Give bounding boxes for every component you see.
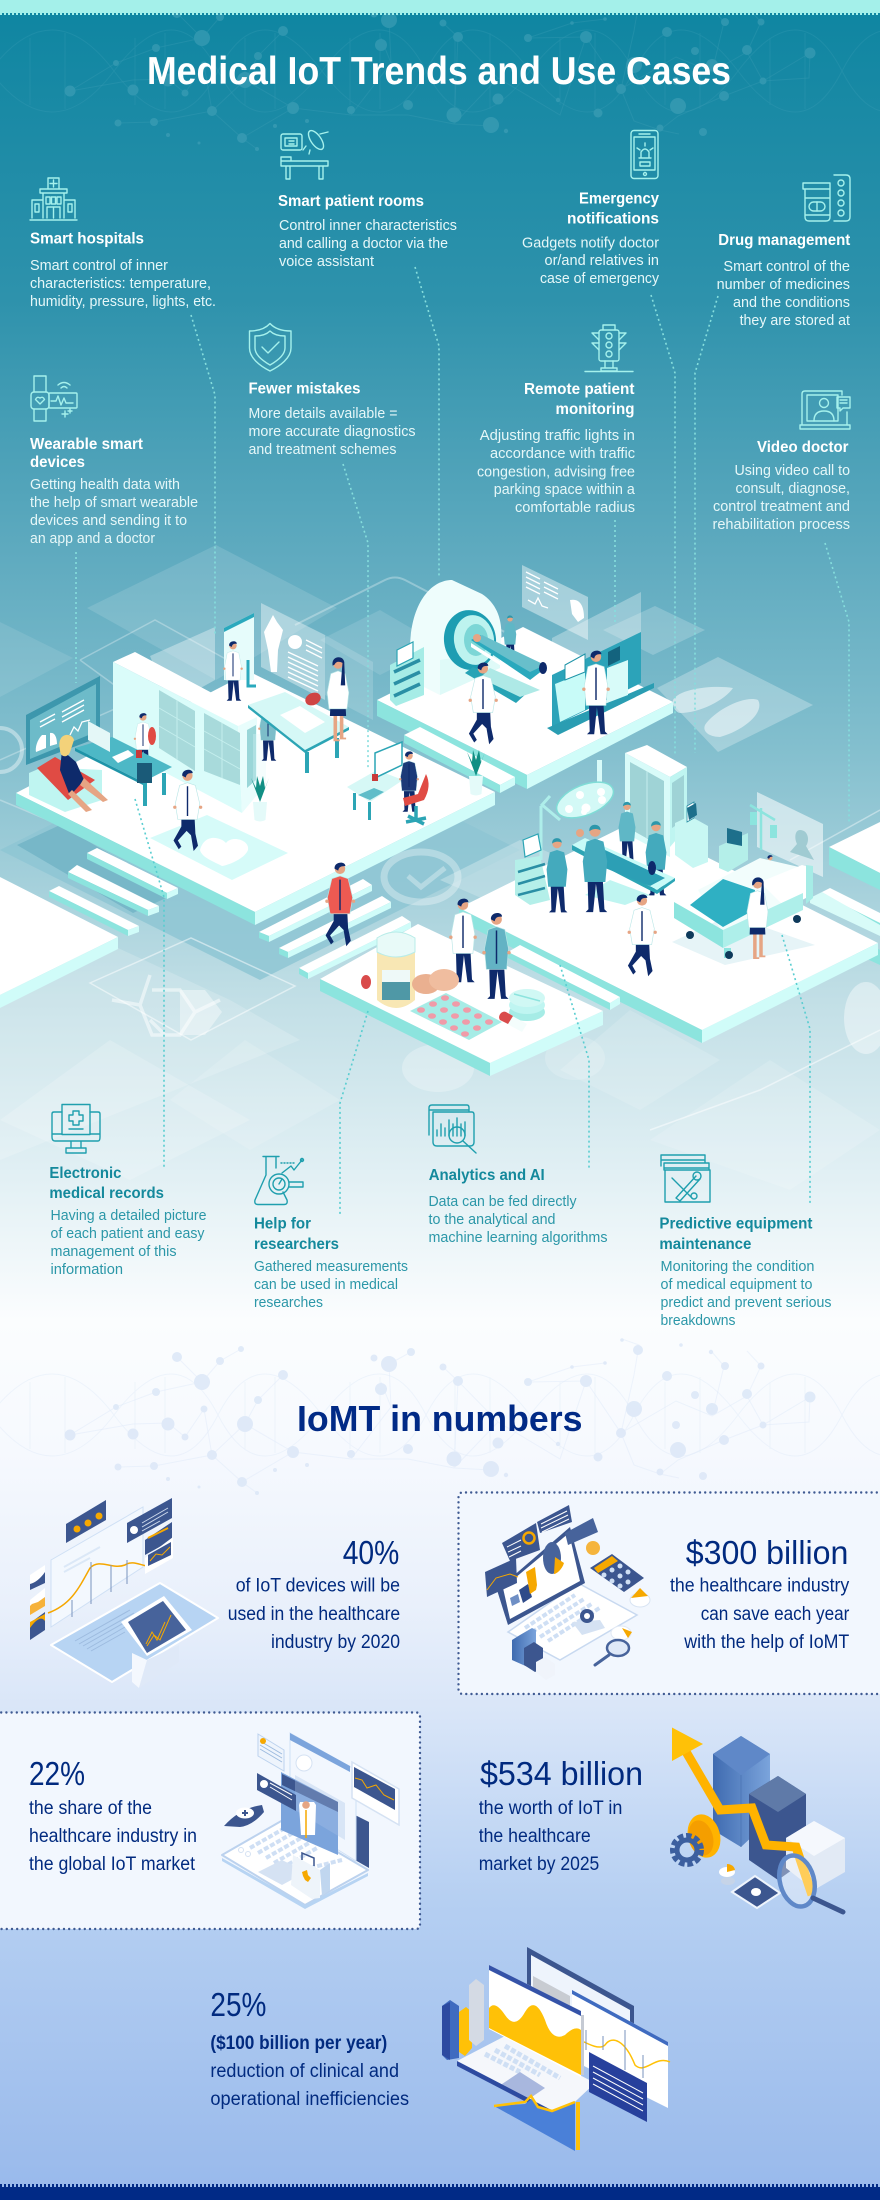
icon: flask with gauge bbox=[255, 1156, 304, 1204]
description bbox=[428, 1194, 608, 1246]
back panels in offices bbox=[150, 603, 373, 720]
stat: 25 percent bbox=[210, 1947, 670, 2151]
description: humidity, pressure, lights, etc. bbox=[30, 294, 216, 310]
description bbox=[660, 1259, 832, 1329]
description: Having a detailed picture bbox=[50, 1208, 206, 1224]
description: the help of smart wearable bbox=[30, 495, 198, 511]
description: Data can be fed directly bbox=[428, 1194, 577, 1210]
description bbox=[712, 463, 850, 533]
dotted box bbox=[458, 1492, 880, 1694]
description: Getting health data with bbox=[30, 477, 180, 493]
figure: $300 billion bbox=[686, 1535, 848, 1572]
description: of each patient and easy bbox=[50, 1226, 205, 1242]
description bbox=[50, 1208, 206, 1278]
description: the worth of IoT in bbox=[479, 1798, 622, 1819]
figure: $534 billion bbox=[480, 1756, 643, 1793]
right stair bars bbox=[259, 879, 411, 979]
patient in bed bbox=[764, 855, 776, 894]
floating patient data panel bbox=[522, 565, 588, 640]
description: number of medicines bbox=[717, 277, 850, 293]
description: rehabilitation process bbox=[712, 517, 850, 533]
anesthesia cart bbox=[515, 834, 550, 905]
icon: windows with tools bbox=[661, 1155, 710, 1202]
callout: video doctor bbox=[712, 391, 850, 533]
MRI scanner bbox=[410, 580, 501, 695]
callout: remote patient monitoring bbox=[477, 325, 636, 516]
description bbox=[228, 1576, 400, 1653]
surgical lamp bbox=[541, 760, 618, 860]
salmon pills bbox=[412, 969, 459, 994]
cabinet block bbox=[113, 652, 266, 813]
description: the healthcare industry bbox=[670, 1576, 850, 1597]
hospital bed bbox=[674, 858, 813, 959]
description: characteristics: temperature, bbox=[30, 276, 211, 292]
description: the share of the bbox=[29, 1798, 152, 1819]
description: More details available = bbox=[248, 406, 398, 422]
callout: smart patient rooms bbox=[278, 128, 457, 270]
illustration: tablet and floating charts bbox=[30, 1498, 218, 1688]
wall monitor with lungs bbox=[26, 676, 100, 765]
heading: Smart hospitals bbox=[30, 230, 144, 248]
icon: traffic light bbox=[585, 325, 633, 372]
callout: help for researchers bbox=[254, 1156, 408, 1311]
heading: Help for bbox=[254, 1216, 311, 1232]
heading: Remote patient bbox=[524, 381, 635, 398]
plant by stair bbox=[467, 750, 485, 796]
description: operational inefficiencies bbox=[210, 2089, 409, 2110]
pill bottle bbox=[361, 932, 415, 1008]
equipment rack bbox=[390, 642, 424, 706]
stat: 22 percent panel bbox=[0, 1712, 420, 1929]
description: Gathered measurements bbox=[254, 1259, 408, 1275]
front connector bar bbox=[508, 945, 620, 1010]
heading: Smart patient rooms bbox=[278, 193, 424, 210]
heading: researchers bbox=[254, 1236, 339, 1253]
floor mat with heart bbox=[150, 815, 288, 880]
description: healthcare industry in bbox=[29, 1826, 197, 1847]
description: breakdowns bbox=[660, 1313, 736, 1329]
bottom band bbox=[0, 2186, 880, 2200]
description: or/and relatives in bbox=[544, 253, 659, 269]
surgeons in front bbox=[547, 825, 607, 912]
icon: monitor with record bbox=[52, 1104, 100, 1153]
nurse with tablet bbox=[327, 657, 349, 741]
description: machine learning algorithms bbox=[428, 1230, 608, 1246]
far right platform bbox=[810, 822, 880, 935]
figure: 25% bbox=[210, 1987, 266, 2024]
seated doctor bbox=[134, 713, 152, 769]
description: the global IoT market bbox=[29, 1854, 196, 1875]
description: Using video call to bbox=[734, 463, 850, 479]
heading: Drug management bbox=[718, 232, 851, 249]
walking doctor bbox=[173, 770, 202, 851]
leader lines bbox=[76, 267, 849, 1214]
description: Control inner characteristics bbox=[279, 218, 457, 234]
description: Smart control of the bbox=[723, 259, 850, 275]
heading: medical records bbox=[49, 1185, 164, 1202]
heading: Wearable smart bbox=[30, 436, 144, 453]
heading bbox=[49, 1165, 164, 1202]
description bbox=[30, 477, 198, 547]
patient on sofa bbox=[29, 735, 108, 812]
description: and treatment schemes bbox=[248, 442, 396, 458]
description bbox=[477, 428, 636, 516]
description: predict and prevent serious bbox=[660, 1295, 832, 1311]
back stairs right bbox=[804, 892, 880, 965]
description bbox=[522, 236, 660, 287]
callout: electronic medical records bbox=[49, 1104, 207, 1278]
top band bbox=[0, 0, 880, 14]
description: Monitoring the condition bbox=[660, 1259, 814, 1275]
background isometric panels bbox=[0, 545, 880, 1190]
description: information bbox=[50, 1262, 123, 1278]
figure: 40% bbox=[343, 1535, 399, 1572]
upper stair bbox=[404, 727, 515, 793]
platform: surgery and ward bbox=[459, 821, 878, 1043]
description: of medical equipment to bbox=[660, 1277, 812, 1293]
description: management of this bbox=[50, 1244, 176, 1260]
stat: 300 billion panel bbox=[458, 1492, 880, 1694]
dotted box bbox=[0, 1712, 420, 1929]
surgeons behind table bbox=[619, 802, 666, 895]
control console behind glass bbox=[547, 592, 654, 735]
reception desk with monitor bbox=[75, 721, 172, 806]
description: comfortable radius bbox=[515, 500, 635, 516]
description: Gadgets notify doctor bbox=[522, 236, 659, 252]
description: Smart control of inner bbox=[30, 258, 168, 274]
description: case of emergency bbox=[540, 271, 660, 287]
description: control treatment and bbox=[713, 499, 850, 515]
description: and the conditions bbox=[733, 295, 850, 311]
capsule bbox=[499, 1012, 527, 1032]
icon: smart watch bbox=[31, 376, 77, 421]
illustration: laptop with doctor bbox=[222, 1733, 399, 1909]
heading: maintenance bbox=[659, 1236, 751, 1253]
description: to the analytical and bbox=[428, 1212, 556, 1228]
heading: devices bbox=[30, 454, 85, 471]
description: an app and a doctor bbox=[30, 531, 155, 547]
description: market by 2025 bbox=[479, 1854, 599, 1875]
description bbox=[29, 1798, 197, 1875]
description bbox=[210, 2033, 409, 2110]
description: can save each year bbox=[701, 1604, 850, 1625]
description: Adjusting traffic lights in bbox=[480, 428, 635, 444]
figure: 22% bbox=[29, 1756, 85, 1793]
heading: notifications bbox=[567, 210, 659, 228]
stacked tablets bbox=[509, 989, 545, 1021]
icon: windows with magnifier bbox=[429, 1105, 476, 1153]
heading: Fewer mistakes bbox=[248, 380, 361, 398]
heading: Analytics and AI bbox=[429, 1167, 545, 1184]
description: devices and sending it to bbox=[30, 513, 187, 529]
woman walking on stairs bbox=[325, 863, 355, 946]
description: ($100 billion per year) bbox=[210, 2033, 387, 2054]
description: can be used in medical bbox=[254, 1277, 398, 1293]
icon: laptop with doctor bbox=[800, 391, 850, 429]
description bbox=[254, 1259, 408, 1311]
callout: emergency notifications bbox=[522, 130, 660, 287]
isometric hospital illustration bbox=[0, 565, 880, 1076]
platform: reception and offices bbox=[16, 672, 495, 925]
far left platform bbox=[0, 877, 118, 1008]
description bbox=[248, 406, 416, 458]
heading: Predictive equipment bbox=[659, 1216, 813, 1232]
operating room cabinet bbox=[625, 745, 687, 857]
walking doctor in ward bbox=[628, 895, 657, 976]
platform: pharmacy bbox=[320, 924, 603, 1076]
icon: bed and monitor bbox=[281, 128, 328, 179]
description: they are stored at bbox=[740, 313, 850, 329]
heading: Electronic bbox=[49, 1165, 121, 1182]
description: used in the healthcare bbox=[228, 1604, 400, 1625]
title: Medical IoT Trends and Use Cases bbox=[147, 50, 731, 93]
supply cart with monitor bbox=[675, 802, 708, 868]
heading bbox=[567, 190, 659, 228]
chair back bbox=[148, 727, 156, 745]
heading bbox=[30, 436, 144, 471]
platform: MRI room bbox=[377, 627, 673, 789]
plant by cabinet bbox=[251, 776, 269, 822]
description: the healthcare bbox=[479, 1826, 591, 1847]
description: with the help of IoMT bbox=[683, 1632, 850, 1653]
left stair bars bbox=[49, 848, 178, 936]
description: accordance with traffic bbox=[490, 446, 635, 462]
MRI doctor bbox=[469, 663, 498, 744]
meeting table and seated doctor bbox=[248, 690, 349, 773]
dna and network pattern: header bbox=[0, 0, 880, 151]
dna and network pattern: numbers section bbox=[0, 1338, 880, 1495]
description: congestion, advising free bbox=[477, 464, 635, 480]
heading bbox=[254, 1216, 339, 1253]
heading: Video doctor bbox=[757, 439, 848, 456]
heading: Emergency bbox=[579, 190, 659, 208]
callout: drug management bbox=[717, 175, 851, 329]
description bbox=[717, 259, 850, 329]
description: and calling a doctor via the bbox=[279, 236, 448, 252]
heading bbox=[659, 1216, 813, 1253]
heading: numbers section: IoMT in numbers bbox=[297, 1398, 582, 1439]
illustration: laptop with charts bbox=[485, 1505, 650, 1680]
MRI nurse bbox=[504, 615, 516, 660]
description bbox=[670, 1576, 850, 1653]
nurse at bed bbox=[747, 877, 768, 959]
callout: smart hospitals bbox=[30, 178, 216, 310]
description: researches bbox=[254, 1295, 323, 1311]
heading: monitoring bbox=[556, 401, 634, 418]
description: of IoT devices will be bbox=[236, 1576, 400, 1597]
description bbox=[30, 258, 216, 310]
description: voice assistant bbox=[279, 254, 374, 270]
icon: shield with check bbox=[250, 324, 291, 371]
description: parking space within a bbox=[494, 482, 636, 498]
icon: hospital bbox=[30, 178, 77, 220]
office desk and worker bbox=[347, 742, 429, 824]
description: consult, diagnose, bbox=[736, 481, 850, 497]
ward back panel, IV and monitor bbox=[719, 792, 823, 877]
icon: phone with alarm bbox=[631, 130, 658, 178]
description: industry by 2020 bbox=[271, 1632, 400, 1653]
icon: pills bottle and blister bbox=[803, 175, 850, 221]
doctor with clipboard bbox=[223, 641, 243, 701]
callout: wearable smart devices bbox=[30, 376, 198, 547]
illustration: laptop with dashboards bbox=[442, 1947, 670, 2151]
stat: 40 percent bbox=[30, 1498, 400, 1688]
callout: analytics and AI bbox=[428, 1105, 608, 1246]
callout: predictive equipment maintenance bbox=[659, 1155, 832, 1329]
console operator bbox=[582, 651, 610, 734]
description: reduction of clinical and bbox=[210, 2061, 399, 2082]
stat: 534 billion bbox=[479, 1728, 845, 1912]
description bbox=[279, 218, 457, 270]
blister pack bbox=[410, 993, 502, 1040]
operating table with patient bbox=[572, 829, 675, 905]
MRI table with patient bbox=[465, 634, 547, 703]
description bbox=[479, 1798, 622, 1875]
doctor and colleague in pharmacy bbox=[449, 899, 511, 999]
description: more accurate diagnostics bbox=[248, 424, 416, 440]
illustration: growth arrow and bars bbox=[672, 1728, 845, 1912]
callout: fewer mistakes bbox=[248, 324, 416, 458]
heading bbox=[524, 381, 635, 418]
